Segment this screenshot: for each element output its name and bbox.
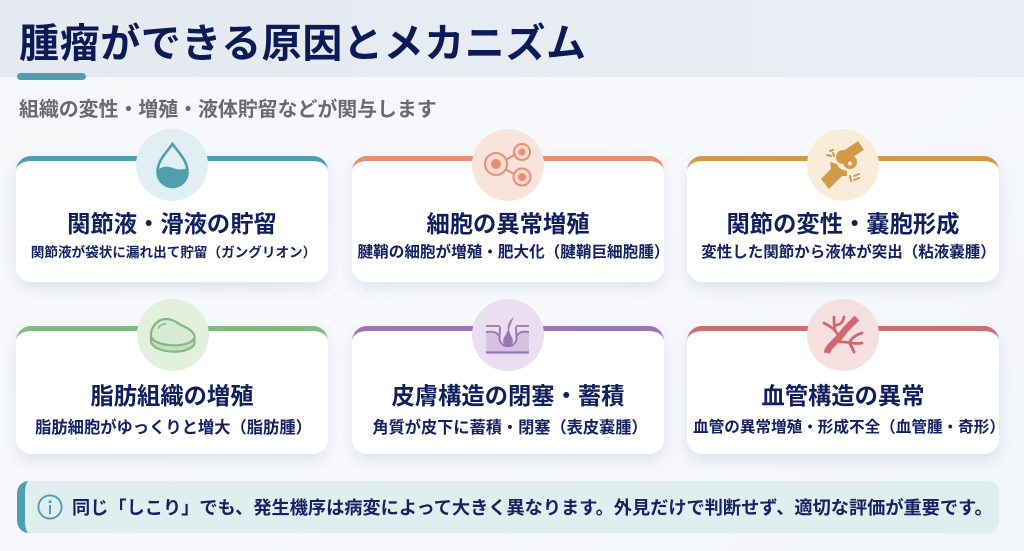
card body	[352, 326, 664, 454]
icon: skin follicle	[472, 299, 544, 371]
icon: blood vessels	[807, 299, 879, 371]
panel: vascular structure	[684, 299, 1005, 462]
card description: 変性した関節から液体が突出（粘液嚢腫）	[701, 244, 996, 261]
card description: 血管の異常増殖・形成不全（血管腫・奇形）	[693, 419, 1005, 436]
card heading: 血管構造の異常	[761, 383, 925, 409]
callout	[17, 481, 999, 533]
card body	[16, 156, 328, 282]
card description: 関節液が袋状に漏れ出て貯留（ガングリオン）	[31, 245, 316, 260]
card heading: 細胞の異常増殖	[426, 211, 590, 237]
panel: abnormal cell growth	[350, 129, 669, 290]
card body	[352, 156, 664, 282]
icon: info	[37, 494, 63, 520]
header band	[0, 0, 1024, 77]
panel: fatty tissue growth	[14, 299, 330, 462]
callout text: 同じ「しこり」でも、発生機序は病変によって大きく異なります。外見だけで判断せず、適切な評価が重要です。	[72, 498, 993, 518]
icon: joint	[807, 129, 879, 201]
card heading: 皮膚構造の閉塞・蓄積	[392, 383, 624, 409]
card heading: 関節の変性・嚢胞形成	[727, 211, 959, 237]
card description: 脂肪細胞がゆっくりと増大（脂肪腫）	[35, 419, 312, 437]
panel: synovial fluid	[14, 129, 330, 290]
card heading: 脂肪組織の増殖	[90, 383, 254, 409]
title: 腫瘤ができる原因とメカニズム	[19, 22, 587, 66]
title accent rule	[17, 73, 86, 80]
panel: joint degeneration	[684, 129, 1002, 290]
panel: skin structure	[350, 299, 666, 462]
icon: water drop	[136, 129, 208, 201]
icon: fat lump	[137, 299, 209, 371]
card description: 角質が皮下に蓄積・閉塞（表皮嚢腫）	[372, 419, 648, 437]
card heading: 関節液・滑液の貯留	[67, 211, 277, 237]
icon: dividing cells	[472, 129, 544, 201]
subtitle: 組織の変性・増殖・液体貯留などが関与します	[19, 99, 437, 121]
card description: 腱鞘の細胞が増殖・肥大化（腱鞘巨細胞腫）	[358, 244, 669, 261]
card body	[687, 156, 999, 282]
card body	[16, 326, 328, 454]
card body	[687, 326, 999, 454]
